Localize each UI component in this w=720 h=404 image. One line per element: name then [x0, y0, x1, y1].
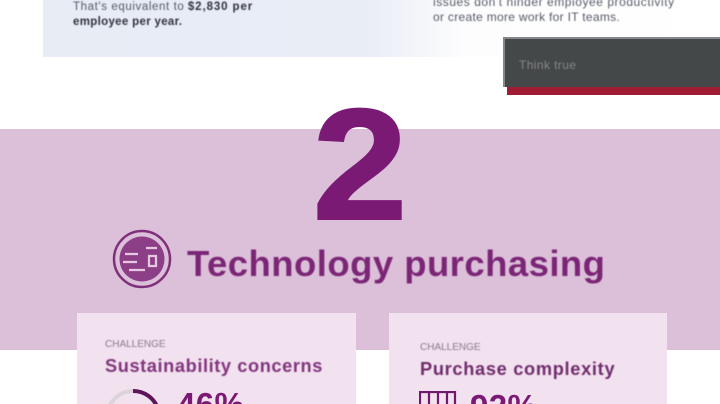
text block: productivity note: [432, 0, 675, 24]
button red underside: [507, 47, 720, 95]
button dark face: [503, 37, 720, 87]
text block: productivity note: or create more work for IT teams.: [433, 10, 620, 24]
card label: CHALLENGE: [105, 339, 166, 350]
panel: top cost summary: [43, 0, 720, 57]
button label: Think true: [519, 58, 576, 72]
heading: Technology purchasing: [187, 243, 605, 284]
text block: cost per employee: employee per year.: [73, 16, 182, 28]
text block: cost per employee: [72, 0, 253, 28]
panel: purchase complexity card: [389, 313, 667, 404]
section number: 2: [313, 77, 407, 253]
card label: CHALLENGE: [420, 342, 481, 353]
icon: purchasing badge: [112, 230, 172, 288]
panel: sustainability concerns card: [77, 313, 356, 404]
panel: section band: [0, 129, 720, 350]
card title: Sustainability concerns: [105, 356, 323, 376]
icon: donut chart: [108, 389, 158, 404]
button: dark call to action: [503, 37, 720, 95]
icon: building: [419, 391, 456, 404]
card title: Purchase complexity: [420, 359, 615, 379]
text block: cost per employee: That's equivalent to $2,830 per: [73, 1, 253, 13]
